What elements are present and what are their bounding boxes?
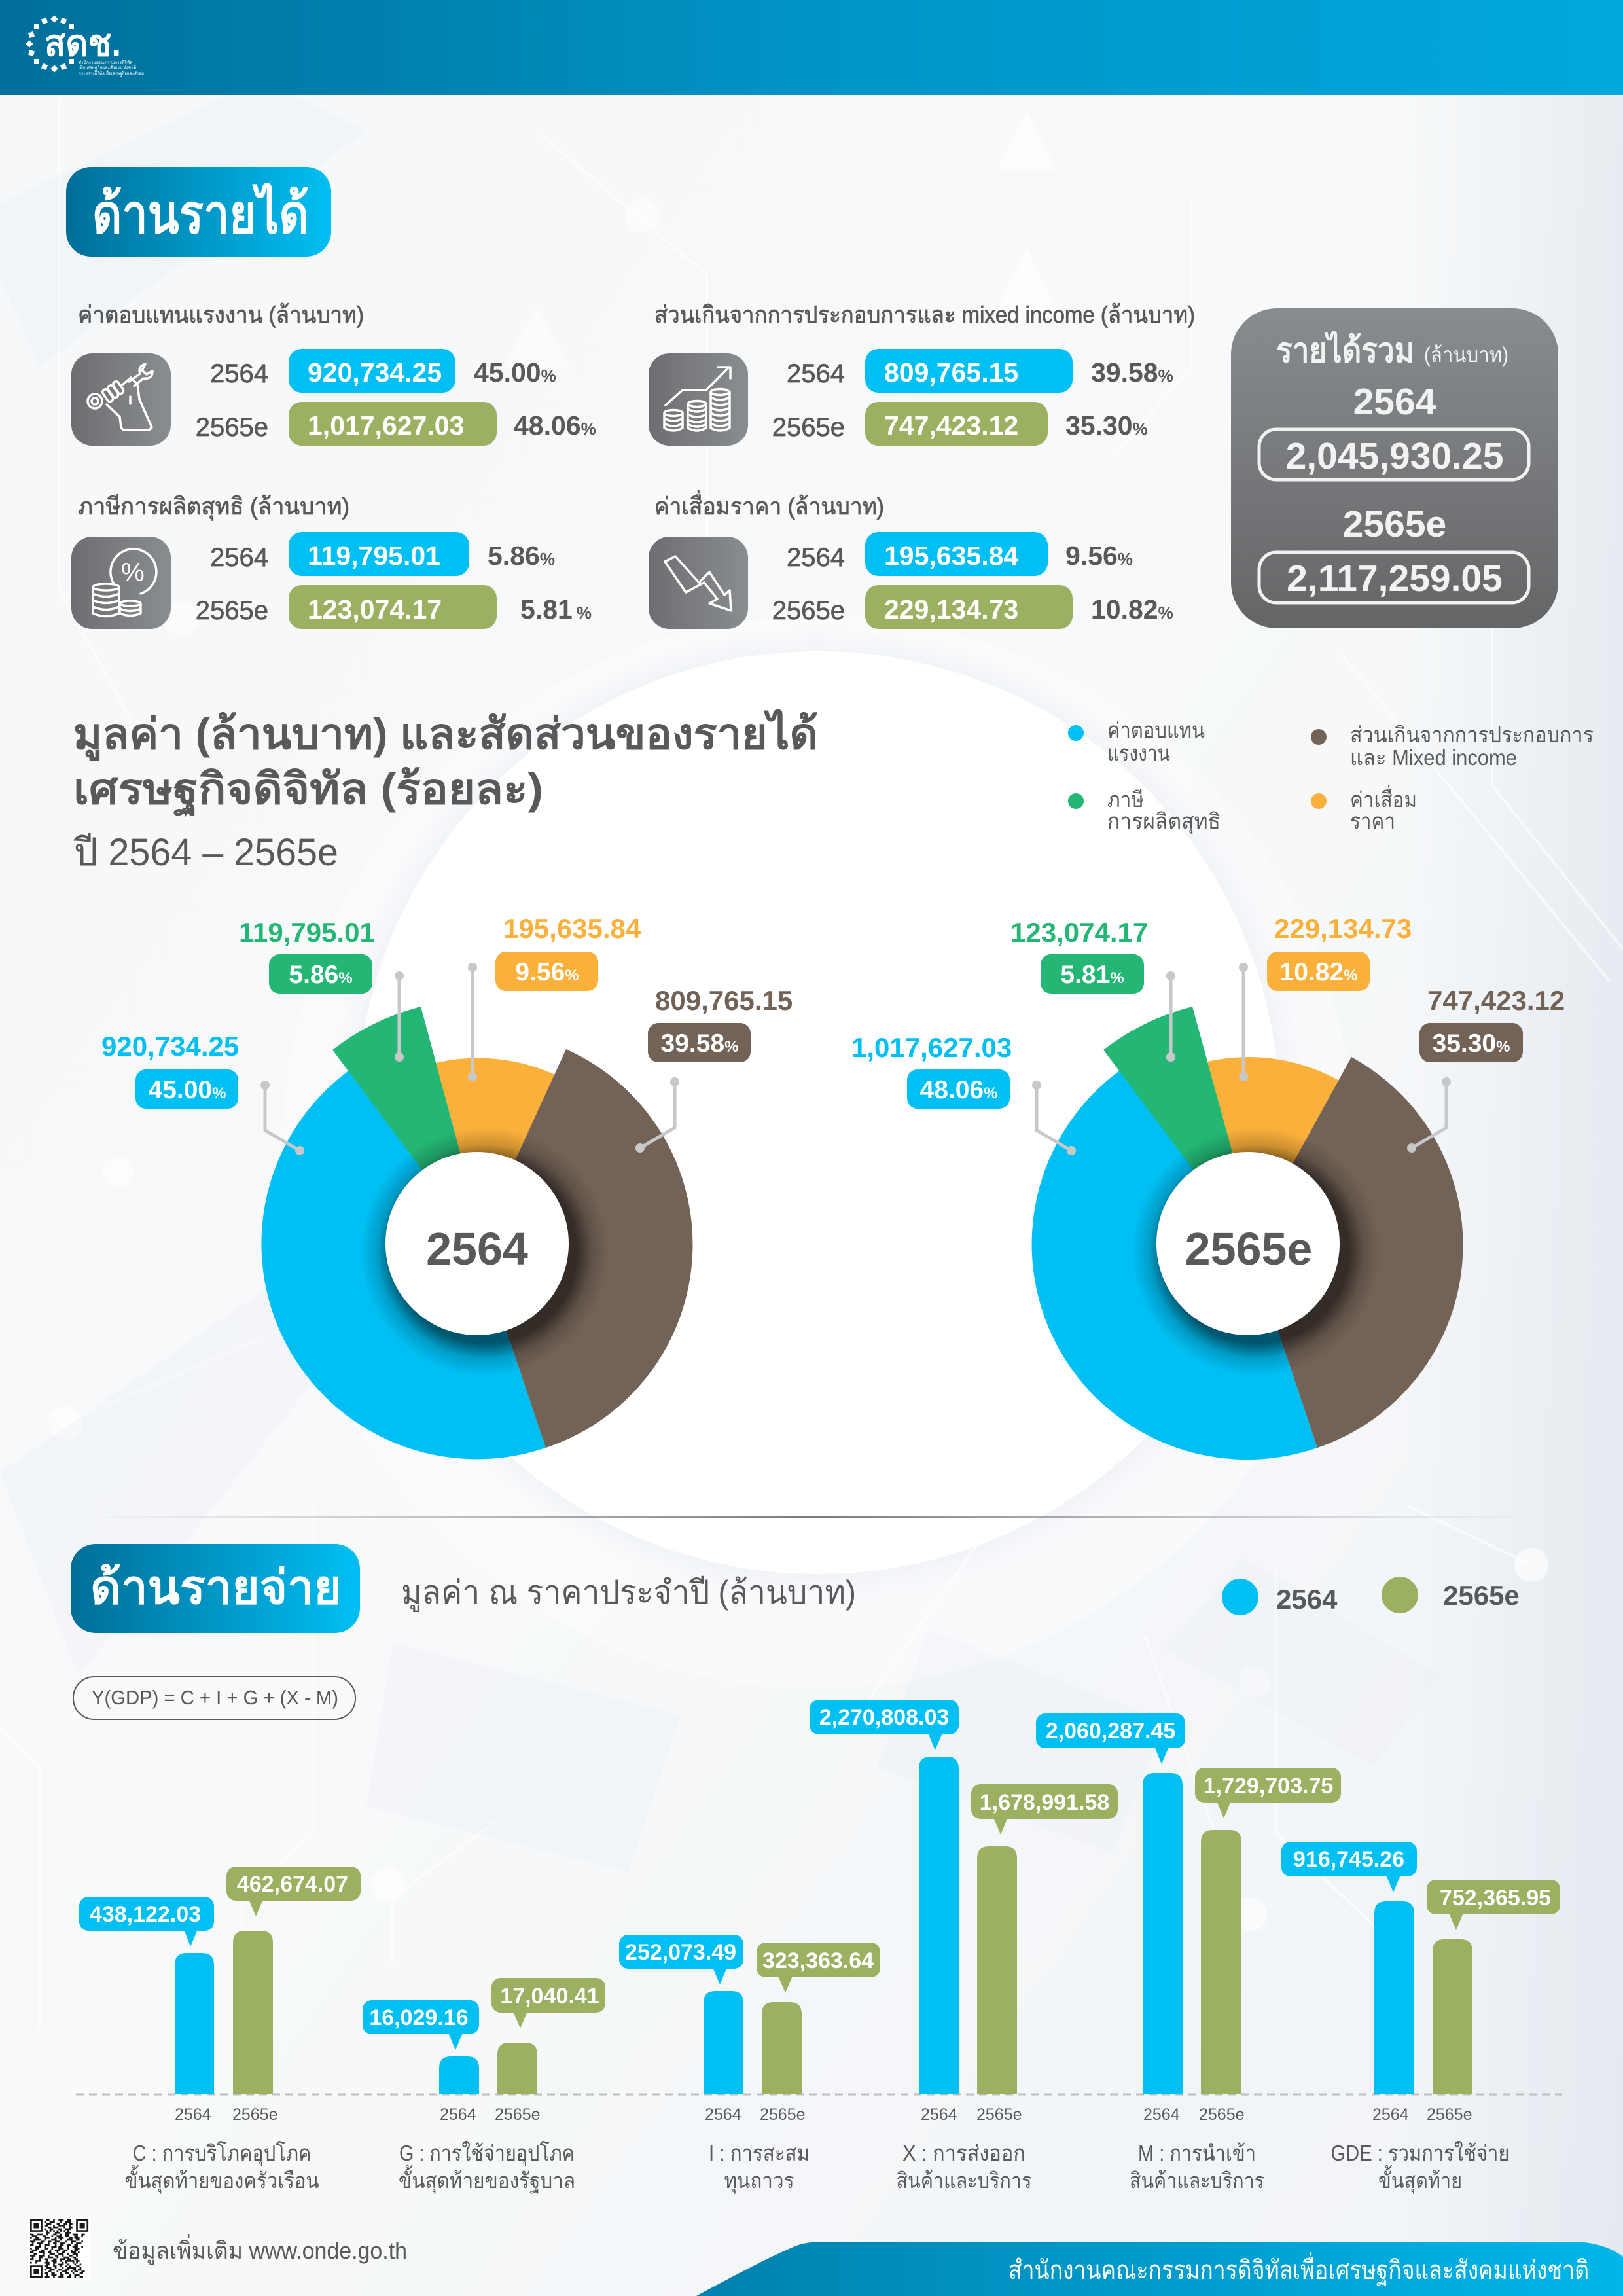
panel: operating surplus and mixed income: 39.58% (1091, 357, 1173, 387)
callouts: 2564: 809,765.15 (655, 985, 793, 1016)
group: C household consumption: C : การบริโภคอุปโภค (132, 2141, 312, 2166)
callouts: 2564: 119,795.01 (239, 917, 375, 948)
group: M imports: 2,060,287.45 (1046, 1719, 1175, 1744)
panel: depreciation: 2565e (772, 596, 845, 625)
logo: เพื่อเศรษฐกิจและสังคมแห่งชาติ (79, 63, 136, 71)
legend: income components: การผลิตสุทธิ (1107, 809, 1221, 834)
panel: depreciation: 229,134.73 (884, 594, 1018, 624)
chart title: เศรษฐกิจดิจิทัล (ร้อยละ) (73, 764, 543, 817)
panel: operating surplus and mixed income: 747,423.12 (884, 410, 1018, 440)
panel: depreciation: 2564 (787, 543, 845, 572)
group: C household consumption (79, 1867, 361, 2194)
heading badge: income side: ด้านรายได้ (92, 183, 309, 245)
heading badge: expenditure side (71, 1544, 360, 1633)
panel: indirect taxes: 2565e (196, 596, 268, 625)
panel: indirect taxes: 123,074.17 (308, 594, 442, 624)
group: I investment: I : การสะสม (709, 2141, 810, 2165)
group: I investment (619, 1935, 880, 2194)
panel: total income: 2,045,930.25 (1286, 435, 1503, 477)
panel: indirect taxes: ภาษีการผลิตสุทธิ (ล้านบาท) (78, 493, 349, 521)
panel: compensation of employees: 920,734.25 (308, 357, 442, 387)
panel: operating surplus and mixed income: ส่วนเกินจากการประกอบการและ mixed income (ล้านบาท) (654, 301, 1195, 328)
panel: depreciation: 10.82% (1091, 594, 1173, 624)
heading badge: expenditure side: ด้านรายจ่าย (90, 1562, 342, 1614)
legend: income components: ภาษี (1107, 787, 1144, 812)
group: M imports: 2565e (1199, 2106, 1245, 2124)
group: X exports (810, 1700, 1118, 2193)
callouts: 2564: 45.00% (149, 1076, 226, 1104)
group: G government consumption: G : การใช้จ่ายอุปโภค (399, 2141, 575, 2166)
chart title: ปี 2564 – 2565e (73, 831, 338, 874)
callouts: 2564: 39.58% (661, 1030, 738, 1058)
donut chart: 2564: 2564 (426, 1223, 528, 1274)
panel: indirect taxes: 5.81% (520, 594, 592, 624)
group: X exports: 2,270,808.03 (819, 1705, 949, 1730)
panel: compensation of employees: 2564 (210, 359, 268, 388)
heading badge: income side (66, 167, 331, 257)
group: M imports: 1,729,703.75 (1204, 1774, 1333, 1799)
panel: depreciation: 9.56% (1065, 541, 1133, 571)
group: I investment: 2565e (760, 2106, 806, 2124)
group: C household consumption: 438,122.03 (90, 1902, 201, 1927)
group: X exports: 2565e (976, 2106, 1022, 2124)
footer: agency banner (696, 2242, 1623, 2296)
donut chart: 2564 (261, 1007, 692, 1459)
chart title (73, 709, 818, 874)
footer: QR code (28, 2217, 90, 2280)
panel: total income (1231, 308, 1558, 628)
group: GDE total expenditure (1281, 1842, 1560, 2194)
legend: income components: แรงงาน (1107, 741, 1170, 765)
group: G government consumption: 16,029.16 (369, 2005, 469, 2030)
panel: total income: 2,117,259.05 (1287, 558, 1503, 600)
legend: income components (1068, 718, 1594, 834)
icon: coins and rising arrow (649, 353, 748, 446)
group: X exports: 1,678,991.58 (980, 1790, 1109, 1815)
callouts: 2564: 5.86% (289, 961, 353, 989)
subtitle: current prices: มูลค่า ณ ราคาประจำปี (ล้านบาท) (401, 1574, 856, 1612)
footer: more info link: ข้อมูลเพิ่มเติม www.onde.go.th (113, 2234, 407, 2265)
group: I investment: 252,073.49 (625, 1940, 736, 1965)
formula pill: Y(GDP) = C + I + G + (X - M) (92, 1686, 338, 1709)
panel: compensation of employees: 1,017,627.03 (308, 410, 464, 440)
group: I investment: ทุนถาวร (724, 2168, 794, 2194)
panel: depreciation: ค่าเสื่อมราคา (ล้านบาท) (654, 490, 884, 520)
donut chart: 2565e (1032, 1007, 1463, 1460)
legend: income components: ราคา (1350, 809, 1395, 833)
panel: total income: (ล้านบาท) (1424, 343, 1508, 367)
panel: operating surplus and mixed income: 35.30% (1065, 410, 1148, 440)
formula pill (73, 1677, 355, 1719)
group: G government consumption: ขั้นสุดท้ายของรัฐบาล (399, 2165, 575, 2194)
group: X exports: X : การส่งออก (902, 2141, 1026, 2165)
group: G government consumption: 2564 (440, 2106, 476, 2124)
legend: income components: ส่วนเกินจากการประกอบการ (1350, 723, 1594, 747)
panel: indirect taxes: 5.86% (488, 541, 555, 571)
panel: depreciation (649, 490, 1173, 629)
panel: compensation of employees: 2565e (196, 413, 268, 442)
icon: percent and coins: % (121, 558, 145, 587)
legend: income components: ค่าเสื่อม (1350, 785, 1417, 812)
panel: compensation of employees: 45.00% (474, 357, 556, 387)
callouts: 2565e: 229,134.73 (1274, 913, 1412, 944)
callouts: 2565e: 1,017,627.03 (851, 1032, 1012, 1063)
header bar (0, 0, 1623, 95)
panel: compensation of employees: 48.06% (514, 410, 596, 440)
callouts: 2565e: 5.81% (1060, 961, 1124, 989)
panel: operating surplus and mixed income: 809,765.15 (884, 357, 1018, 387)
group: M imports: 2564 (1143, 2106, 1180, 2124)
callouts: 2565e: 10.82% (1280, 958, 1357, 986)
legend: income components: ค่าตอบแทน (1107, 718, 1205, 742)
group: G government consumption: 2565e (495, 2106, 541, 2124)
group: I investment: 323,363.64 (762, 1948, 874, 1973)
panel: operating surplus and mixed income: 2565e (772, 413, 845, 442)
donut chart: 2565e: 2565e (1185, 1223, 1312, 1274)
group: GDE total expenditure: 2565e (1427, 2106, 1472, 2124)
logo: สำนักงานคณะกรรมการดิจิทัล (79, 60, 132, 65)
group: GDE total expenditure: 2564 (1372, 2106, 1409, 2124)
group: GDE total expenditure: 916,745.26 (1293, 1847, 1404, 1872)
icon: percent and coins (71, 537, 171, 629)
group: M imports: สินค้าและบริการ (1130, 2168, 1264, 2193)
callouts: 2564 (101, 913, 793, 1155)
group: X exports: 2564 (921, 2106, 957, 2124)
logo (26, 15, 144, 77)
callouts: 2565e: 123,074.17 (1010, 917, 1148, 948)
callouts: 2565e: 48.06% (920, 1076, 997, 1104)
panel: operating surplus and mixed income (649, 301, 1195, 446)
panel: operating surplus and mixed income: 2564 (787, 359, 845, 388)
group: C household consumption: 462,674.07 (237, 1872, 348, 1897)
logo: กระทรวงดิจิทัลเพื่อเศรษฐกิจและสังคม (79, 69, 144, 77)
group: X exports: สินค้าและบริการ (897, 2168, 1031, 2193)
group: M imports: M : การนำเข้า (1138, 2141, 1256, 2165)
panel: depreciation: 195,635.84 (884, 541, 1018, 571)
chart title: มูลค่า (ล้านบาท) และสัดส่วนของรายได้ (73, 709, 818, 761)
callouts: 2565e (851, 913, 1565, 1155)
icon: hand with wrench (71, 353, 171, 446)
callouts: 2564: 9.56% (515, 958, 579, 986)
bar chart: expenditure (76, 1700, 1562, 2194)
panel: compensation of employees (71, 301, 596, 446)
panel: compensation of employees: ค่าตอบแทนแรงงาน (ล้านบาท) (78, 301, 364, 328)
group: GDE total expenditure: 752,365.95 (1440, 1886, 1551, 1910)
group: G government consumption (363, 1978, 605, 2194)
callouts: 2565e: 35.30% (1433, 1030, 1510, 1058)
panel: total income: รายได้รวม (1276, 331, 1414, 370)
icon: falling arrow (649, 537, 748, 629)
panel: total income: 2564 (1353, 381, 1436, 423)
group: GDE total expenditure: ขั้นสุดท้าย (1378, 2165, 1462, 2194)
group: GDE total expenditure: GDE : รวมการใช้จ่าย (1331, 2141, 1509, 2165)
callouts: 2564: 195,635.84 (503, 913, 641, 944)
panel: indirect taxes (71, 493, 592, 629)
legend: years: 2564 (1276, 1584, 1338, 1615)
group: C household consumption: 2564 (175, 2106, 211, 2124)
group: M imports (1036, 1713, 1341, 2193)
logo: สดช. (45, 22, 121, 63)
callouts: 2564: 920,734.25 (101, 1031, 239, 1062)
legend: income components: และ Mixed income (1350, 745, 1517, 770)
group: I investment: 2564 (705, 2106, 741, 2124)
group: C household consumption: 2565e (232, 2106, 278, 2124)
group: G government consumption: 17,040.41 (500, 1984, 599, 2009)
panel: indirect taxes: 2564 (210, 543, 268, 572)
panel: total income: 2565e (1343, 503, 1446, 545)
group: C household consumption: ขั้นสุดท้ายของครัวเรือน (124, 2165, 319, 2194)
legend: years (1222, 1577, 1520, 1615)
callouts: 2565e: 747,423.12 (1427, 985, 1565, 1016)
panel: indirect taxes: 119,795.01 (308, 541, 440, 571)
legend: years: 2565e (1443, 1580, 1520, 1611)
